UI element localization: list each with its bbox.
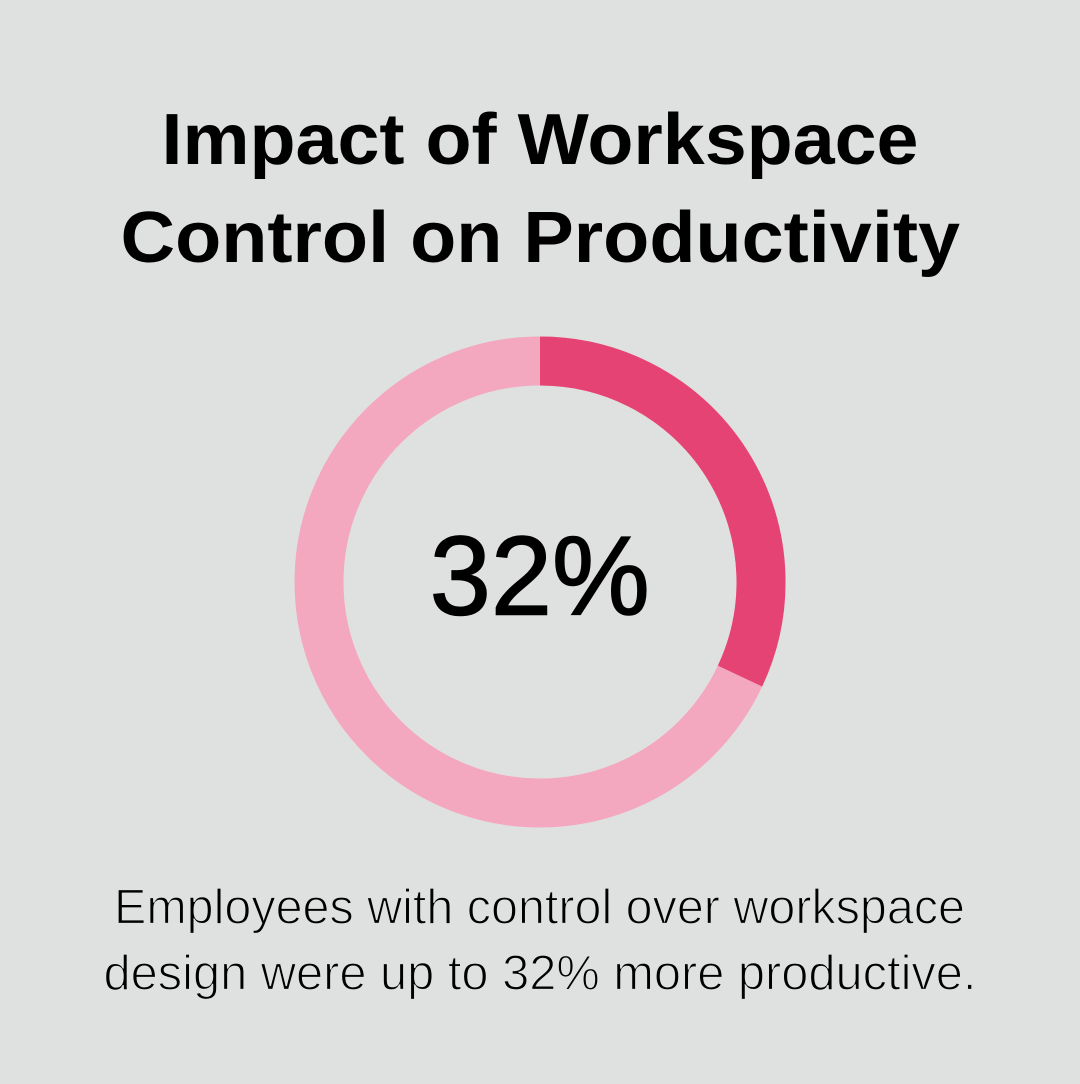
caption: design were up to 32% more productive.: [104, 946, 976, 1000]
remaining share ring: [319, 361, 761, 803]
title: [120, 100, 960, 278]
title: Control on Productivity: [120, 198, 960, 278]
title: Impact of Workspace: [162, 100, 918, 180]
donut chart: [319, 361, 761, 803]
center value: 32%: [430, 514, 650, 638]
caption: [104, 880, 976, 1000]
caption: Employees with control over workspace: [114, 880, 965, 934]
32% share arc: [540, 361, 761, 676]
